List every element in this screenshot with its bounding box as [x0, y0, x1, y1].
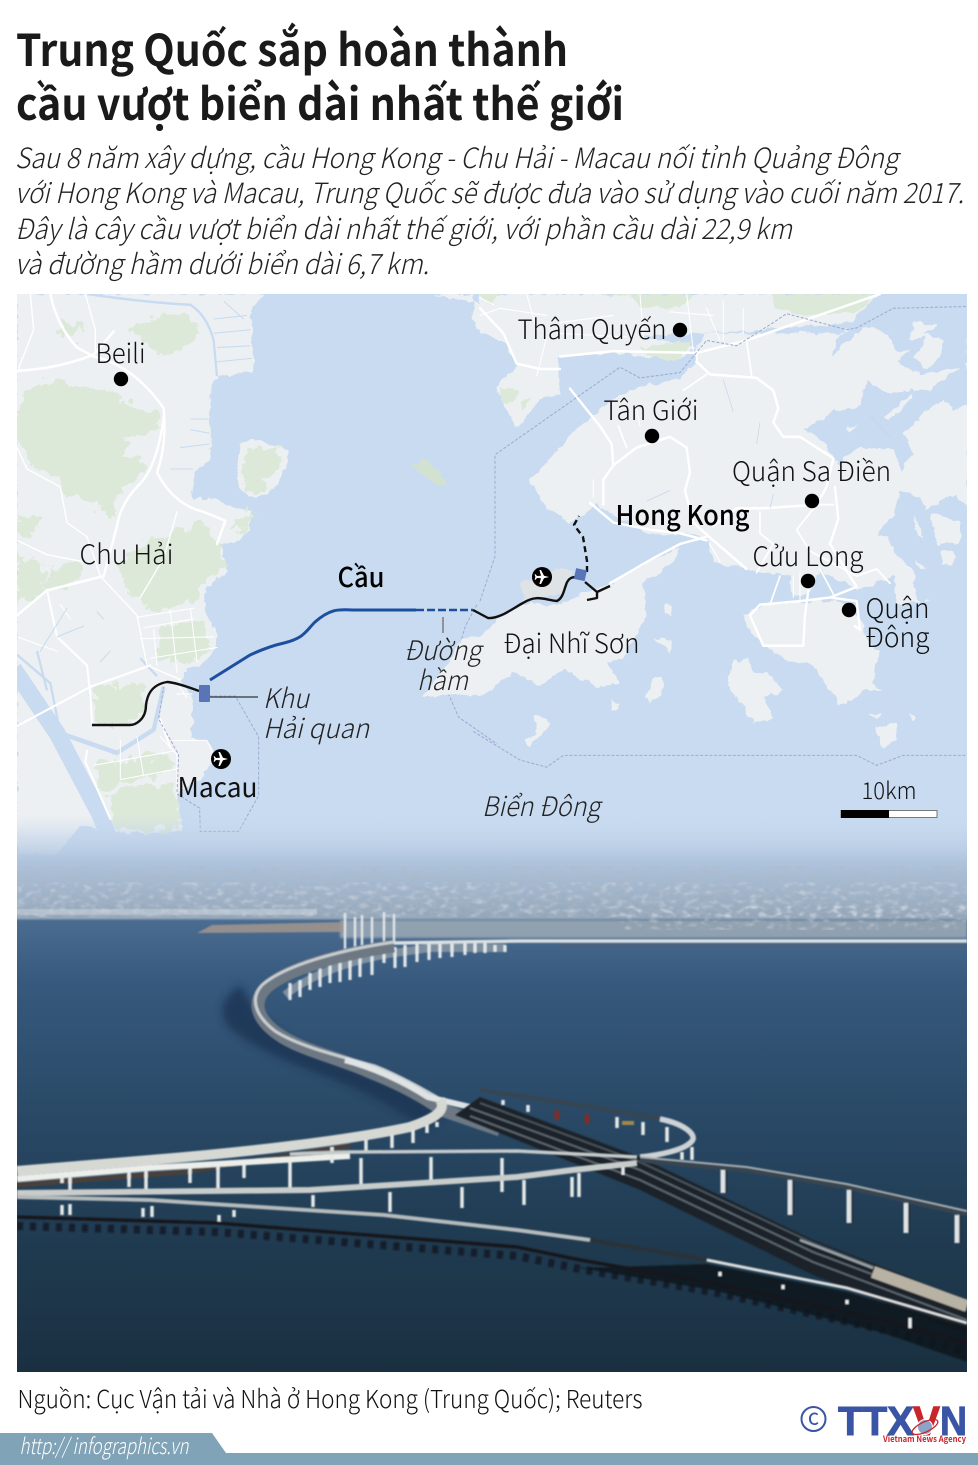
bridge section	[210, 610, 416, 680]
intro text: Sau 8 năm xây dựng, cầu Hong Kong - Chu Hải - Macau nối tỉnh Quảng Đông	[15, 137, 902, 177]
label: Quận Sa Điền: Quận Sa Điền	[732, 450, 891, 489]
scale bar: 10km	[862, 772, 916, 806]
copyright mark	[802, 1405, 826, 1431]
pillars	[62, 1100, 692, 1222]
label: Thâm Quyến: Thâm Quyến	[518, 308, 666, 347]
logo: TTXVN	[802, 1398, 967, 1445]
map: west land Zhuhai and Macau	[14, 294, 497, 858]
label: Quận Đông: Đông	[866, 616, 930, 655]
photo: lower causeway	[455, 1097, 967, 1335]
intro text: Đây là cây cầu vượt biển dài nhất thế giới, với phần cầu dài 22,9 km	[15, 208, 794, 248]
middle ramp	[17, 1163, 637, 1193]
dark wedge	[580, 1264, 967, 1362]
wordmark: N	[940, 1398, 967, 1444]
loop ramp upper	[17, 1100, 442, 1171]
photo: sea shadow	[222, 985, 445, 1130]
map: New Territories bays and islands	[803, 294, 968, 601]
icon: Macau port square	[199, 685, 210, 702]
panel: photo of the bridge	[17, 815, 967, 1372]
footer bar	[0, 1433, 978, 1465]
callout line: tunnel	[442, 617, 444, 633]
bridge columns	[290, 943, 505, 1000]
map: roads and borders in Hong Kong	[473, 294, 968, 767]
label: Quận Đông	[866, 596, 930, 654]
wordmark: V	[913, 1398, 941, 1444]
label: Cầu: Cầu	[338, 556, 384, 595]
tunnel to Hong Kong	[574, 516, 587, 572]
callout line: customs	[210, 696, 258, 698]
wordmark: TTX	[838, 1398, 914, 1444]
road link west to Zhuhai	[92, 682, 199, 725]
deck shadow band	[285, 948, 505, 995]
undersea tunnel section	[416, 609, 473, 611]
icon: Hong Kong port square	[574, 568, 587, 581]
red cranes and boat	[557, 1110, 587, 1124]
cable towers	[345, 912, 394, 953]
panel: map	[14, 294, 968, 864]
white specks	[720, 1272, 910, 1328]
photo: far bridge and curve	[255, 912, 967, 1130]
scale bar	[841, 772, 937, 818]
website link: http:// infographics.vn	[20, 1429, 189, 1461]
globe	[910, 1417, 940, 1437]
label: Đại Nhĩ Sơn: Đại Nhĩ Sơn	[504, 622, 640, 661]
agency tagline: Vietnam News Agency	[882, 1433, 966, 1445]
wordmark	[838, 1398, 967, 1444]
photo: distant city	[17, 866, 967, 938]
copyright mark: C	[808, 1405, 819, 1430]
source note: Nguồn: Cục Vận tải và Nhà ở Hong Kong (Trung Quốc); Reuters	[18, 1380, 642, 1416]
label: Đường hầm: Đường	[404, 629, 484, 668]
label: Khu Hải quan: Hải quan	[263, 707, 370, 746]
label: Chu Hai: Chu Hải	[80, 533, 174, 572]
label: Khu Hải quan	[266, 686, 370, 744]
photo: ramps on the left	[17, 1100, 967, 1362]
label: Cửu Long: Cửu Long	[752, 535, 864, 574]
map: east land Hong Kong and Shenzhen	[423, 294, 968, 748]
main causeway curve	[258, 946, 500, 1130]
photo: sea and haze	[17, 815, 967, 1372]
label: Macau: Macau	[178, 766, 258, 805]
title: cầu vượt biển dài nhất thế giới	[16, 69, 624, 133]
label: Hong Kong: Hong Kong	[616, 494, 750, 533]
low viaduct	[17, 1217, 967, 1343]
label: Đường hầm	[407, 637, 484, 690]
lower ramp	[17, 1197, 590, 1240]
horizontal ramp	[290, 1151, 637, 1157]
road link east to Hong Kong	[473, 577, 610, 618]
intro text	[15, 137, 964, 283]
label: Khu Hải quan: Khu	[263, 677, 310, 716]
label: Đường hầm: hầm	[417, 659, 469, 698]
label: Quận Đông: Quận	[866, 587, 930, 626]
label: Beili: Beili	[96, 332, 146, 371]
title	[16, 15, 624, 133]
label: Tân Giới: Tân Giới	[604, 389, 698, 428]
brown underside	[17, 1146, 350, 1185]
label: Biển Đông: Biển Đông	[482, 785, 603, 824]
icon: Macau airport	[211, 749, 231, 769]
intro text: và đường hầm dưới biển dài 6,7 km.	[15, 243, 429, 283]
photo: right ramp and loop	[480, 1090, 967, 1243]
title: Trung Quốc sắp hoàn thành	[16, 15, 568, 79]
far deck	[394, 941, 967, 943]
icon: Hong Kong airport	[532, 567, 552, 587]
city markers	[114, 323, 856, 617]
map: bridge route	[92, 516, 610, 725]
